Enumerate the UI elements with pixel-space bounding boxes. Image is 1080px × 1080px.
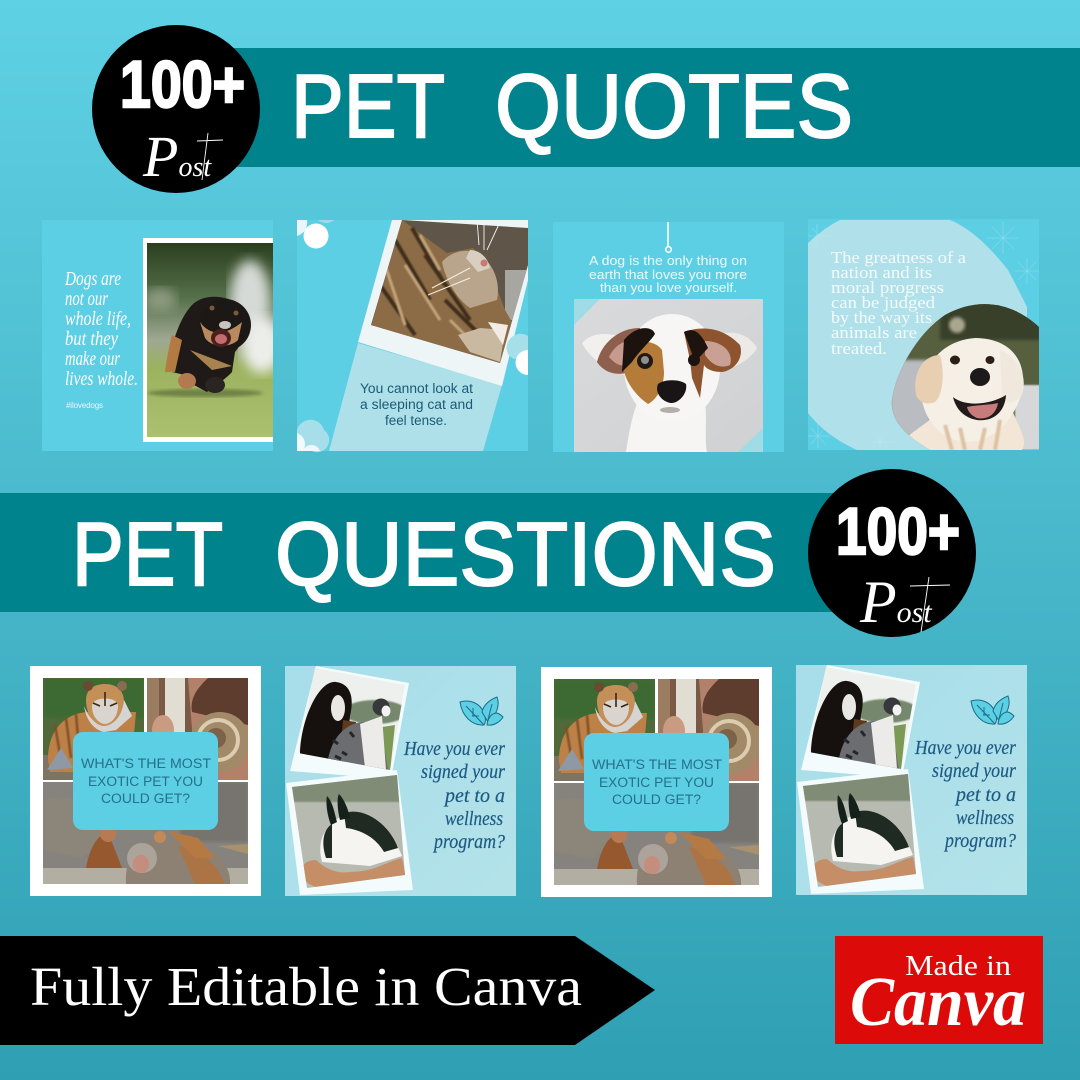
photo collage bbox=[43, 678, 250, 884]
badge: made in canva: Made in bbox=[905, 950, 1012, 982]
question text: EXOTIC PET YOU bbox=[88, 774, 203, 789]
pale tilted strip bbox=[329, 343, 502, 451]
panel: loyal dog quote card bbox=[553, 222, 784, 452]
quote text: than you love yourself. bbox=[600, 280, 737, 295]
badge: made in canva bbox=[835, 936, 1043, 1044]
question box bbox=[73, 732, 218, 830]
photo: jack russell bbox=[574, 299, 763, 452]
question text: wellness bbox=[956, 807, 1014, 829]
quote text: A dog is the only thing on bbox=[589, 253, 747, 268]
banner: pet questions bbox=[0, 493, 860, 612]
polaroid photos bbox=[285, 666, 413, 895]
quote text: lives whole. bbox=[65, 368, 138, 390]
arrow banner: fully editable in canva: Fully Editable in Canva bbox=[30, 956, 582, 1017]
question text: wellness bbox=[445, 808, 503, 830]
quote text bbox=[831, 248, 966, 358]
heading: pet quotes: QUOTES bbox=[495, 57, 853, 157]
hashtag: #ilovedogs bbox=[66, 401, 103, 410]
arrow banner: fully editable in canva bbox=[0, 936, 655, 1045]
quote text: moral progress bbox=[831, 278, 944, 297]
question text: Have you ever bbox=[403, 738, 505, 760]
quote text: treated. bbox=[831, 339, 887, 358]
panel: wellness question card bbox=[285, 666, 516, 896]
quote text: You cannot look at bbox=[360, 381, 473, 396]
panel: exotic pet question card bbox=[30, 666, 261, 896]
photo: golden retriever bbox=[890, 300, 1040, 452]
question text: WHAT'S THE MOST bbox=[592, 757, 722, 772]
quote text: not our bbox=[65, 288, 108, 310]
badge: 100+ post bbox=[808, 469, 976, 637]
heading: pet questions bbox=[72, 505, 776, 605]
panel: greatness of a nation quote card bbox=[808, 219, 1040, 452]
quote text: earth that loves you more bbox=[589, 267, 747, 282]
photo: running puppy bbox=[143, 238, 282, 442]
decorative bubbles bbox=[297, 220, 528, 452]
icon: leaves bbox=[460, 697, 503, 725]
decorative sparkles bbox=[808, 222, 1039, 450]
question text: program? bbox=[432, 831, 505, 853]
quote text: can be judged bbox=[831, 293, 936, 312]
quote text: The greatness of a bbox=[831, 248, 966, 267]
quote text: whole life, bbox=[65, 308, 131, 330]
question text: COULD GET? bbox=[612, 792, 701, 807]
quote text bbox=[589, 253, 747, 295]
badge: 100+ post: Post bbox=[859, 569, 932, 635]
heading: pet quotes bbox=[291, 57, 853, 157]
badge: 100+ post: Post bbox=[142, 124, 212, 189]
badge: 100+ post: 100+ bbox=[120, 47, 245, 121]
quote text: Dogs are bbox=[64, 268, 121, 290]
question text: Have you ever bbox=[914, 737, 1016, 759]
quote text bbox=[360, 381, 473, 428]
question text bbox=[403, 738, 505, 853]
question text: signed your bbox=[932, 760, 1016, 782]
heading: pet quotes: PET bbox=[291, 57, 445, 157]
banner: pet quotes bbox=[175, 48, 1080, 167]
quote text: a sleeping cat and bbox=[360, 397, 473, 412]
polaroid: sleeping cat bbox=[358, 220, 530, 386]
quote text: animals are bbox=[831, 323, 917, 342]
badge: made in canva: Canva bbox=[850, 964, 1026, 1041]
question text: program? bbox=[943, 830, 1016, 852]
question text bbox=[914, 737, 1016, 852]
panel: sleeping cat quote card bbox=[297, 220, 530, 452]
question text bbox=[592, 757, 722, 807]
question text bbox=[81, 756, 211, 806]
quote text: nation and its bbox=[831, 263, 932, 282]
photo collage bbox=[554, 679, 761, 885]
question text: signed your bbox=[421, 761, 505, 783]
badge: 100+ post: 100+ bbox=[836, 494, 960, 568]
panel: exotic pet question card repeat bbox=[541, 667, 772, 897]
question text: COULD GET? bbox=[101, 791, 190, 806]
pale paint blob bbox=[808, 220, 1027, 450]
question text: pet to a bbox=[954, 784, 1016, 806]
quote text bbox=[64, 268, 138, 390]
icon: leaves bbox=[971, 696, 1014, 724]
quote text: by the way its bbox=[831, 308, 932, 327]
heading: pet questions: PET bbox=[72, 505, 223, 605]
panel: dogs quote card bbox=[42, 220, 282, 451]
polaroid photos bbox=[796, 665, 924, 894]
panel: wellness question card repeat bbox=[796, 665, 1027, 895]
question text: EXOTIC PET YOU bbox=[599, 775, 714, 790]
badge: 100+ post bbox=[92, 25, 260, 193]
icon: pendant line bbox=[666, 222, 671, 252]
question text: pet to a bbox=[443, 785, 505, 807]
question box bbox=[584, 733, 729, 831]
quote text: feel tense. bbox=[385, 413, 447, 428]
question text: WHAT'S THE MOST bbox=[81, 756, 211, 771]
quote text: but they bbox=[65, 328, 118, 350]
heading: pet questions: QUESTIONS bbox=[275, 505, 776, 605]
quote text: make our bbox=[65, 348, 120, 370]
